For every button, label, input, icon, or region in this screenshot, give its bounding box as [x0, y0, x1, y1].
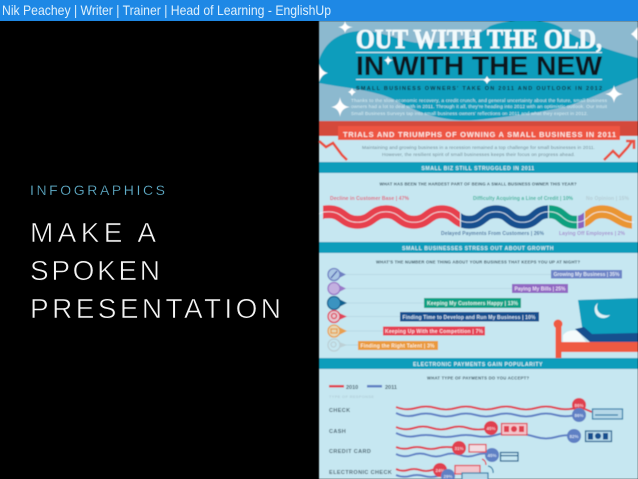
marker: e-check 2011: 29% [443, 474, 453, 479]
ribbon chart [319, 212, 634, 222]
icon: talent search [328, 339, 347, 351]
e-check lines [396, 469, 440, 471]
section label: INFOGRAPHICS [30, 182, 165, 198]
bed frame [554, 320, 638, 358]
marker: credit 2010 [452, 441, 466, 455]
panel: infographic header [319, 20, 638, 126]
intro paragraph: Small Business Surveys tap into small business owners' reflections on 2011 and what they expect in 2012. [351, 111, 588, 117]
icon: credit card blue [500, 452, 518, 461]
legend: 2010 [346, 385, 358, 391]
payment markers [433, 398, 586, 479]
marker: e-check 2011 [441, 469, 455, 479]
marker: credit 2010: 31% [454, 446, 464, 451]
slide heading: SPOKEN [30, 255, 160, 286]
intro paragraph: Thanks to the slow economic recovery, a credit crunch, and general uncertainty about the future, small business [351, 98, 608, 104]
marker: check 2010: 86% [574, 403, 584, 408]
bar: finding time: Finding Time to Develop and Run My Business | 10% [402, 315, 536, 321]
section heading: stress [319, 242, 638, 253]
ribbon labels top: Difficulty Acquiring a Line of Credit | 10% [473, 196, 574, 202]
banner: trials and triumphs [319, 121, 638, 140]
payment row labels: CHECK [329, 408, 351, 414]
icon: e-check red [455, 459, 486, 474]
bar: paying my bills: Paying My Bills | 25% [514, 286, 566, 292]
ribbon labels bottom: Delayed Payments From Customers | 26% [441, 231, 545, 237]
top bar: Nik Peachey | Writer | Trainer | Head of Learning - EnglishUp [2, 2, 331, 18]
payment row labels: ELECTRONIC CHECK [329, 470, 392, 476]
marker: cash 2011 [567, 429, 581, 443]
icon: time [328, 310, 347, 322]
marker: check 2011 [572, 408, 586, 422]
section heading: small biz [319, 162, 638, 173]
row icons [328, 268, 347, 351]
icon: happy customer [328, 296, 347, 310]
title line 2: IN WITH THE NEW [356, 51, 603, 81]
bar: competition: Keeping Up With the Competition | 7% [385, 329, 484, 335]
bar: talent: Finding the Right Talent | 3% [360, 344, 435, 350]
ribbon labels top: Decline in Customer Base | 47% [330, 196, 410, 202]
section heading: stress: SMALL BUSINESSES STRESS OUT ABOUT GROWTH [402, 246, 554, 252]
bar: paying my bills [512, 284, 568, 293]
icon: check [592, 409, 622, 419]
payment row labels: CASH [329, 429, 346, 435]
section heading: electronic payments [319, 358, 638, 369]
marker: cash 2010: 45% [486, 426, 496, 431]
ribbon labels top [330, 196, 630, 202]
payment row labels: CREDIT CARD [329, 449, 371, 455]
type of response label: TYPE OF RESPONSE [329, 394, 374, 399]
banner intro text: However, the resilient spirit of small businesses keeps their focus on progress ahead. [382, 152, 575, 158]
teal blob [319, 20, 638, 120]
legend [329, 385, 397, 391]
credit lines [396, 447, 459, 449]
icon: red up arrow [604, 141, 634, 160]
subtitle: SMALL BUSINESS OWNERS' TAKE ON 2011 AND OUTLOOK IN 2012 [356, 86, 602, 92]
sparkles [319, 21, 638, 117]
ribbon labels top: No Opinion | 15% [586, 196, 630, 202]
intro paragraph [351, 98, 608, 117]
marker: cash 2010 [484, 421, 498, 435]
banner: trials and triumphs: TRIALS AND TRIUMPHS OF OWNING A SMALL BUSINESS IN 2011 [343, 130, 616, 139]
banner intro text [362, 145, 595, 158]
slide heading: PRESENTATION [30, 293, 281, 324]
rule [356, 52, 602, 53]
check lines [396, 406, 592, 412]
cash lines [396, 426, 491, 430]
intro paragraph: owners had a lot to deal with in 2011. Through it all, they're heading into 2012 with an optimistic outlook. Our Intuit [351, 104, 608, 110]
question 2: WHAT'S THE NUMBER ONE THING ABOUT YOUR BUSINESS THAT KEEPS YOU UP AT NIGHT? [376, 260, 580, 264]
icon: cash blue [586, 431, 612, 442]
payment row labels [329, 408, 392, 476]
icon: credit card red [469, 444, 486, 452]
title line 1: OUT WITH THE OLD, [356, 24, 602, 54]
bar: customers happy [424, 298, 521, 308]
top bar [0, 0, 638, 21]
bar: talent [358, 341, 438, 350]
ribbon labels bottom [441, 231, 626, 237]
section heading: electronic payments: ELECTRONIC PAYMENTS GAIN POPULARITY [413, 362, 543, 368]
icon: bills [328, 282, 346, 294]
section heading: small biz: SMALL BIZ STILL STRUGGLED IN 2011 [421, 166, 535, 172]
icon: moon [595, 303, 610, 318]
bar: finding time [400, 312, 539, 322]
rule [356, 79, 602, 80]
window [578, 298, 638, 336]
question 3: WHAT TYPE OF PAYMENTS DO YOU ACCEPT? [427, 376, 529, 380]
icon: red down arrow [319, 141, 347, 160]
question 1: WHAT HAS BEEN THE HARDEST PART OF BEING A SMALL BUSINESS OWNER THIS YEAR? [380, 182, 577, 186]
marker: check 2010 [572, 398, 586, 412]
icon: e-check blue [462, 466, 493, 479]
icon: cash red [502, 424, 527, 435]
slide heading [30, 217, 281, 324]
bar: customers happy: Keeping My Customers Happy | 13% [427, 301, 519, 307]
ribbon labels bottom: Laying Off Employees | 2% [559, 231, 626, 237]
bar: growing my business [551, 270, 622, 278]
legend: 2011 [385, 385, 397, 391]
bar: growing my business: Growing My Business | 35% [554, 272, 620, 278]
marker: credit 2011: 45% [487, 453, 497, 458]
payment icons [455, 409, 622, 479]
bar: competition [383, 326, 485, 336]
marker: e-check 2010 [433, 463, 447, 477]
marker: check 2011: 86% [574, 413, 584, 418]
marker: e-check 2010: 24% [435, 468, 445, 473]
illustration: bed at night [554, 298, 638, 358]
bar labels [358, 270, 622, 350]
marker: cash 2011: 82% [569, 434, 579, 439]
line chart: payments [396, 406, 592, 477]
icon: competition [328, 325, 347, 337]
banner intro text: Maintaining and growing business in a recession remained a top challenge for small businesses in 2011. [362, 145, 595, 151]
blanket [575, 327, 638, 342]
slide heading: MAKE A [30, 217, 156, 248]
icon: growth [328, 268, 346, 280]
panel: infographic [319, 20, 638, 479]
pillow [563, 330, 586, 342]
leader lines [345, 274, 551, 345]
marker: credit 2011 [485, 448, 499, 462]
